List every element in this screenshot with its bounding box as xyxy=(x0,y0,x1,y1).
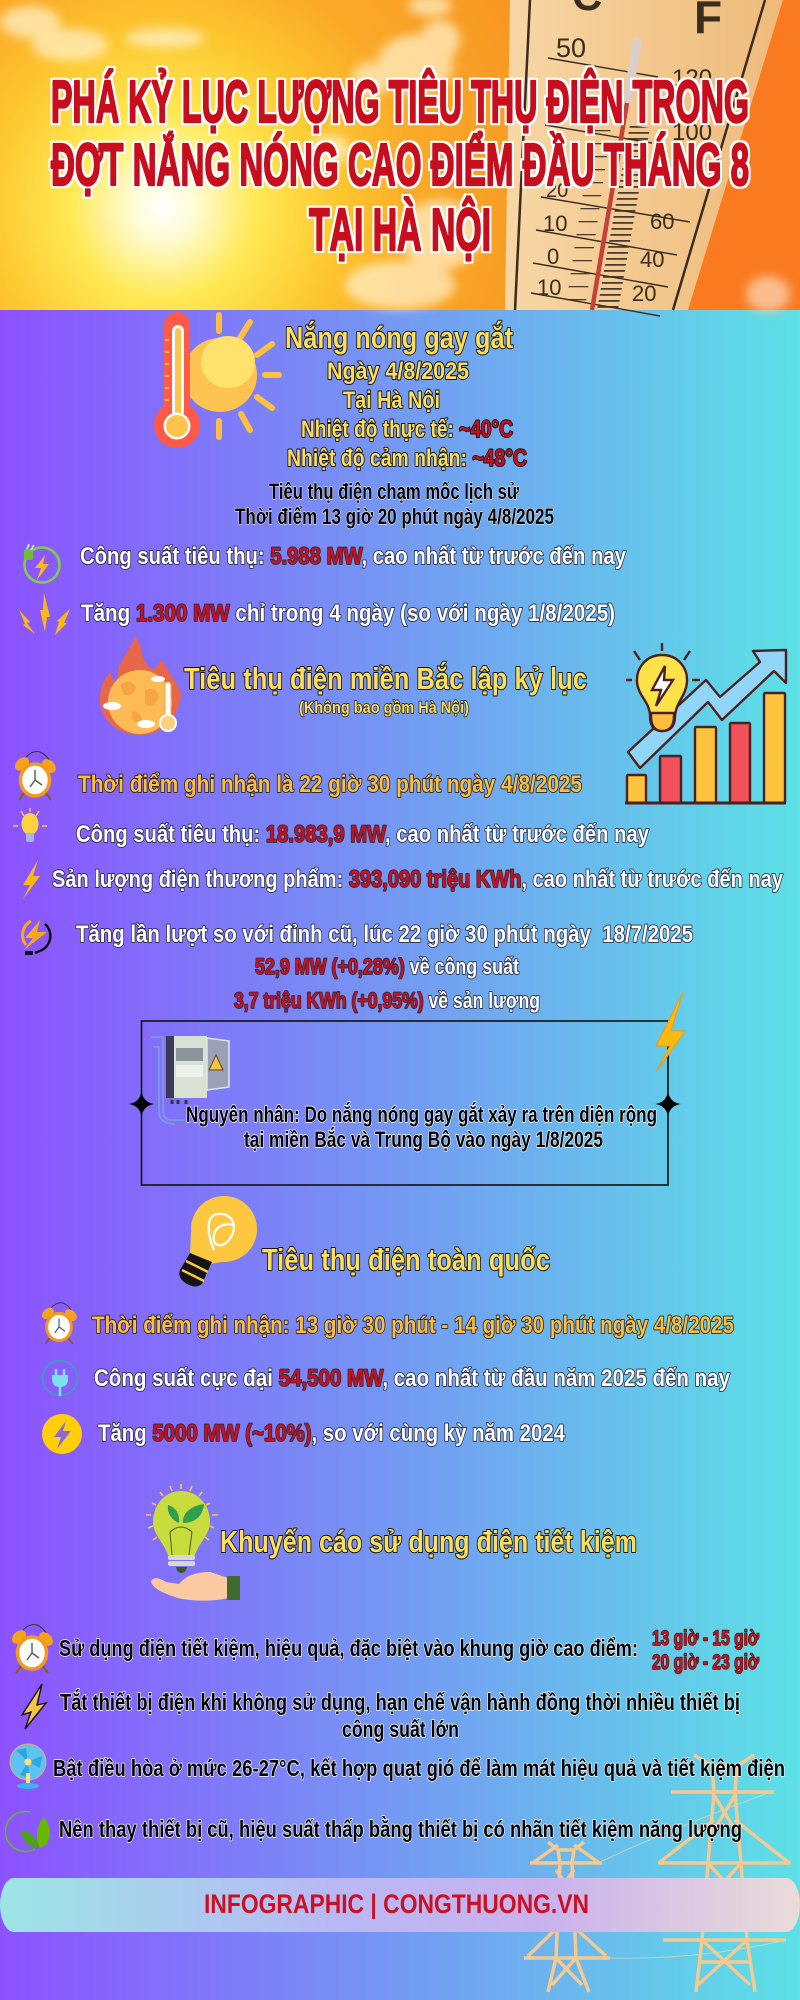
header banner: sun and thermometer photo: 50 xyxy=(556,33,586,63)
icon: black and yellow bolt xyxy=(22,1684,46,1729)
title: TẠI HÀ NỘI xyxy=(309,196,491,263)
text: felt temperature: Nhiệt độ cảm nhận: ~48°C xyxy=(287,445,527,472)
icon: plug with bolt xyxy=(23,920,50,953)
heading: north region record: Tiêu thụ điện miền Bắc lập kỷ lục xyxy=(184,660,587,696)
panel: cause box xyxy=(128,992,685,1185)
icon: thermometer and sun xyxy=(154,312,279,448)
header banner: sun and thermometer photo xyxy=(0,0,800,316)
heading: heatwave: Nắng nóng gay gắt xyxy=(285,319,513,355)
text: output delta: 3,7 triệu KWh (+0,95%) về sản lượng xyxy=(234,988,540,1013)
text: peak hours xyxy=(652,1627,759,1674)
heading: national consumption: Tiêu thụ điện toàn quốc xyxy=(262,1242,550,1277)
icon: small bulb xyxy=(13,808,47,842)
text: footer source: INFOGRAPHIC | CONGTHUONG.VN xyxy=(204,1889,589,1919)
heading: energy saving: Khuyến cáo sử dụng điện tiết kiệm xyxy=(220,1524,637,1559)
header banner: sun and thermometer photo: 20 xyxy=(546,180,568,202)
text: advice 2 xyxy=(60,1688,740,1742)
header banner: sun and thermometer photo: 10 xyxy=(537,275,561,300)
text: Hanoi increase: Tăng 1.300 MW chỉ trong 4 ngày (so với ngày 1/8/2025) xyxy=(81,600,615,627)
header banner: sun and thermometer photo: 40 xyxy=(640,247,664,272)
icon: lightning bolt xyxy=(23,860,40,899)
text: north record time: Thời điểm ghi nhận là 22 giờ 30 phút ngày 4/8/2025 xyxy=(78,771,582,798)
header banner: sun and thermometer photo: 120 xyxy=(672,65,712,92)
text: peak hours: 20 giờ - 23 giờ xyxy=(652,1651,759,1674)
text: historic consumption: Tiêu thụ điện chạm mốc lịch sử xyxy=(269,479,519,504)
text: peak hours: 13 giờ - 15 giờ xyxy=(652,1627,759,1650)
title xyxy=(51,68,749,263)
icon: three bolts xyxy=(19,593,70,635)
footer band xyxy=(0,1878,800,1932)
text: timestamp: Thời điểm 13 giờ 20 phút ngày 4/8/2025 xyxy=(235,504,554,529)
text: advice 2: công suất lớn xyxy=(342,1716,459,1742)
header banner: sun and thermometer photo: 20 xyxy=(632,281,656,306)
icon: national section bulb xyxy=(179,1196,257,1286)
icon: right sparkle xyxy=(655,1091,681,1117)
decoration: transmission towers xyxy=(524,1755,791,1992)
header banner: sun and thermometer photo: 60 xyxy=(650,209,674,234)
text: national capacity: Công suất cực đại 54,500 MW, cao nhất từ đầu năm 2025 đến nay xyxy=(94,1365,731,1392)
text: location: Tại Hà Nội xyxy=(343,387,440,414)
icon: leaf recycle ring xyxy=(5,1811,50,1851)
icon: green bulb on hand xyxy=(146,1484,240,1601)
icon: large lightning bolt xyxy=(656,992,685,1072)
icon: electrical cabinet xyxy=(151,1036,229,1124)
icon: alarm clock national xyxy=(40,1303,79,1344)
header banner: sun and thermometer photo: 100 xyxy=(672,119,712,146)
text: cause line 2: tại miền Bắc và Trung Bộ vào ngày 1/8/2025 xyxy=(244,1127,603,1152)
panel: Hanoi heat summary xyxy=(235,319,554,529)
icon: burning globe xyxy=(100,636,181,735)
icon: left sparkle xyxy=(128,1091,154,1117)
text: excluding Hanoi: (Không bao gồm Hà Nội) xyxy=(299,698,469,717)
text: actual temperature: Nhiệt độ thực tế: ~40°C xyxy=(301,416,513,443)
icon: rising bar chart with bulb xyxy=(625,643,786,803)
text: north capacity: Công suất tiêu thụ: 18.983,9 MW, cao nhất từ trước đến nay xyxy=(76,821,650,848)
header banner: sun and thermometer photo: 10 xyxy=(543,211,567,236)
text: advice 1: Sử dụng điện tiết kiệm, hiệu quả, đặc biệt vào khung giờ cao điểm: xyxy=(59,1635,638,1661)
icon: yellow bolt circle xyxy=(42,1414,82,1454)
icon: alarm clock xyxy=(12,752,59,800)
header banner: sun and thermometer photo: 0 xyxy=(547,244,559,269)
text: Hanoi capacity: Công suất tiêu thụ: 5.988 MW, cao nhất từ trước đến nay xyxy=(80,543,627,570)
text: date: Ngày 4/8/2025 xyxy=(327,358,469,385)
icon: alarm clock advice xyxy=(9,1625,56,1673)
text: capacity delta: 52,9 MW (+0,28%) về công suất xyxy=(255,954,520,979)
text: compared with old peak: Tăng lần lượt so với đỉnh cũ, lúc 22 giờ 30 phút ngày 18/7/2025 xyxy=(76,921,693,948)
icon: plug in green ring xyxy=(24,544,60,582)
icon: plug in circle xyxy=(42,1360,78,1396)
text: cause line 1: Nguyên nhân: Do nắng nóng gay gắt xảy ra trên diện rộng xyxy=(186,1102,657,1127)
icon: electric fan xyxy=(10,1744,46,1789)
text: national increase: Tăng 5000 MW (~10%), so với cùng kỳ năm 2024 xyxy=(98,1420,566,1447)
